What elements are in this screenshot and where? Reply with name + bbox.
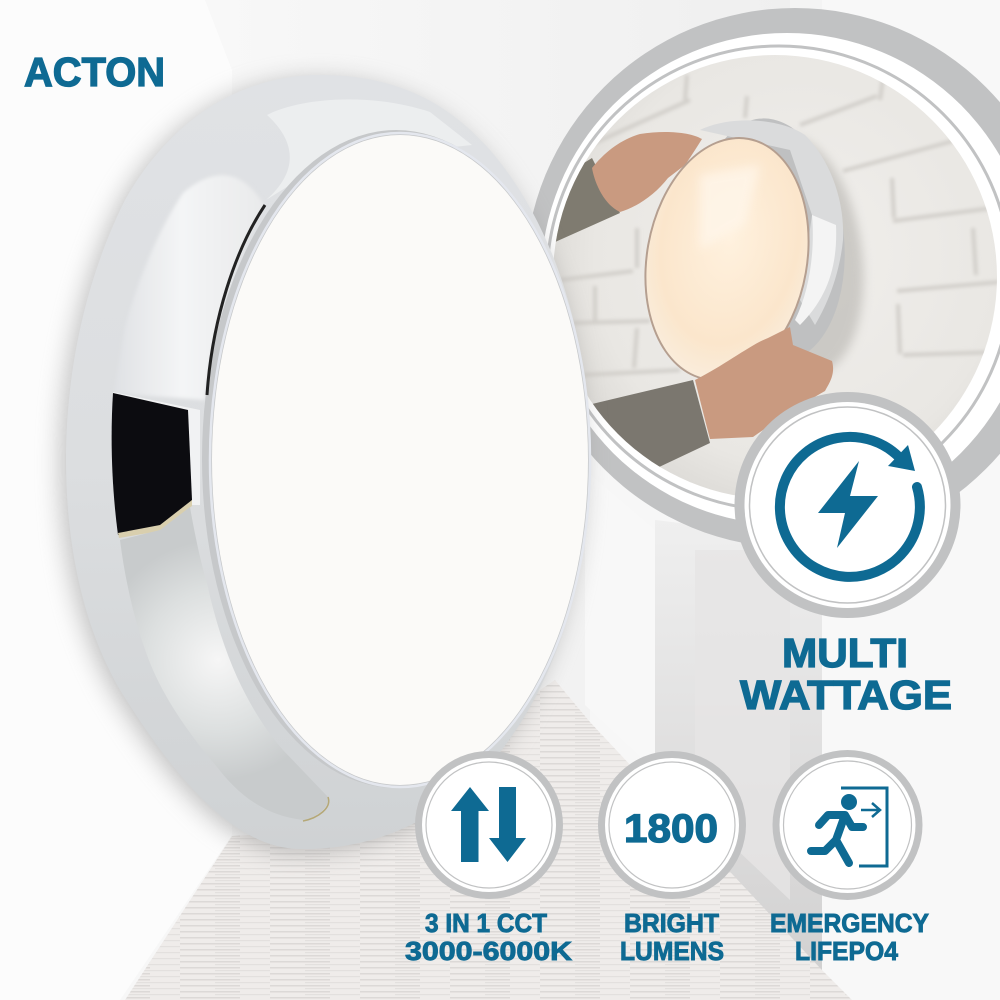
icon: rotating arrow with bolt — [780, 437, 920, 577]
emergency label: LIFEPO4 — [795, 936, 899, 966]
lamp outer housing — [66, 75, 590, 849]
multi wattage label: MULTI — [782, 630, 908, 676]
lamp reflection — [112, 393, 192, 535]
floor — [125, 680, 852, 1000]
brick lines — [560, 75, 1000, 375]
CCT label — [405, 908, 572, 966]
fixture highlight — [795, 215, 836, 325]
multi wattage label: WATTAGE — [740, 672, 952, 718]
CCT label: 3000-6000K — [405, 936, 572, 966]
lamp chrome rim — [202, 130, 590, 788]
hand top — [592, 132, 702, 212]
multi wattage label — [740, 630, 952, 718]
lumens label — [620, 908, 724, 966]
sleeve bottom — [592, 380, 710, 468]
fixture top chrome — [700, 120, 843, 325]
lumens label: LUMENS — [620, 936, 724, 966]
emergency label — [770, 908, 929, 966]
wall shadow of fixture — [808, 139, 868, 370]
lamp diffuser — [212, 135, 588, 785]
CCT label: 3 IN 1 CCT — [425, 908, 547, 938]
emergency label: EMERGENCY — [770, 908, 929, 938]
ACTON title: ACTON — [24, 49, 165, 95]
lumens badge — [598, 751, 746, 899]
hand bottom — [695, 327, 833, 439]
icon: running exit — [811, 788, 887, 866]
fixture housing — [725, 118, 844, 351]
installation photo — [554, 55, 997, 496]
lumens label: BRIGHT — [624, 908, 719, 938]
photo ring — [525, 8, 1000, 548]
icon: up down arrows — [451, 787, 526, 862]
warm diffuser — [646, 139, 808, 377]
diffuser highlight — [700, 165, 760, 250]
lamp upper band highlight — [114, 175, 264, 400]
multi wattage badge — [734, 392, 960, 618]
emergency badge — [772, 750, 922, 900]
CCT badge — [415, 751, 563, 899]
fixture rim — [644, 137, 810, 378]
lamp shadow — [60, 79, 584, 853]
lamp: chrome ceiling light — [60, 75, 590, 853]
lamp lower crescent — [120, 507, 328, 820]
sleeve top — [556, 158, 620, 242]
lamp top cap — [266, 99, 472, 200]
lumens number: 1800 — [624, 807, 718, 851]
